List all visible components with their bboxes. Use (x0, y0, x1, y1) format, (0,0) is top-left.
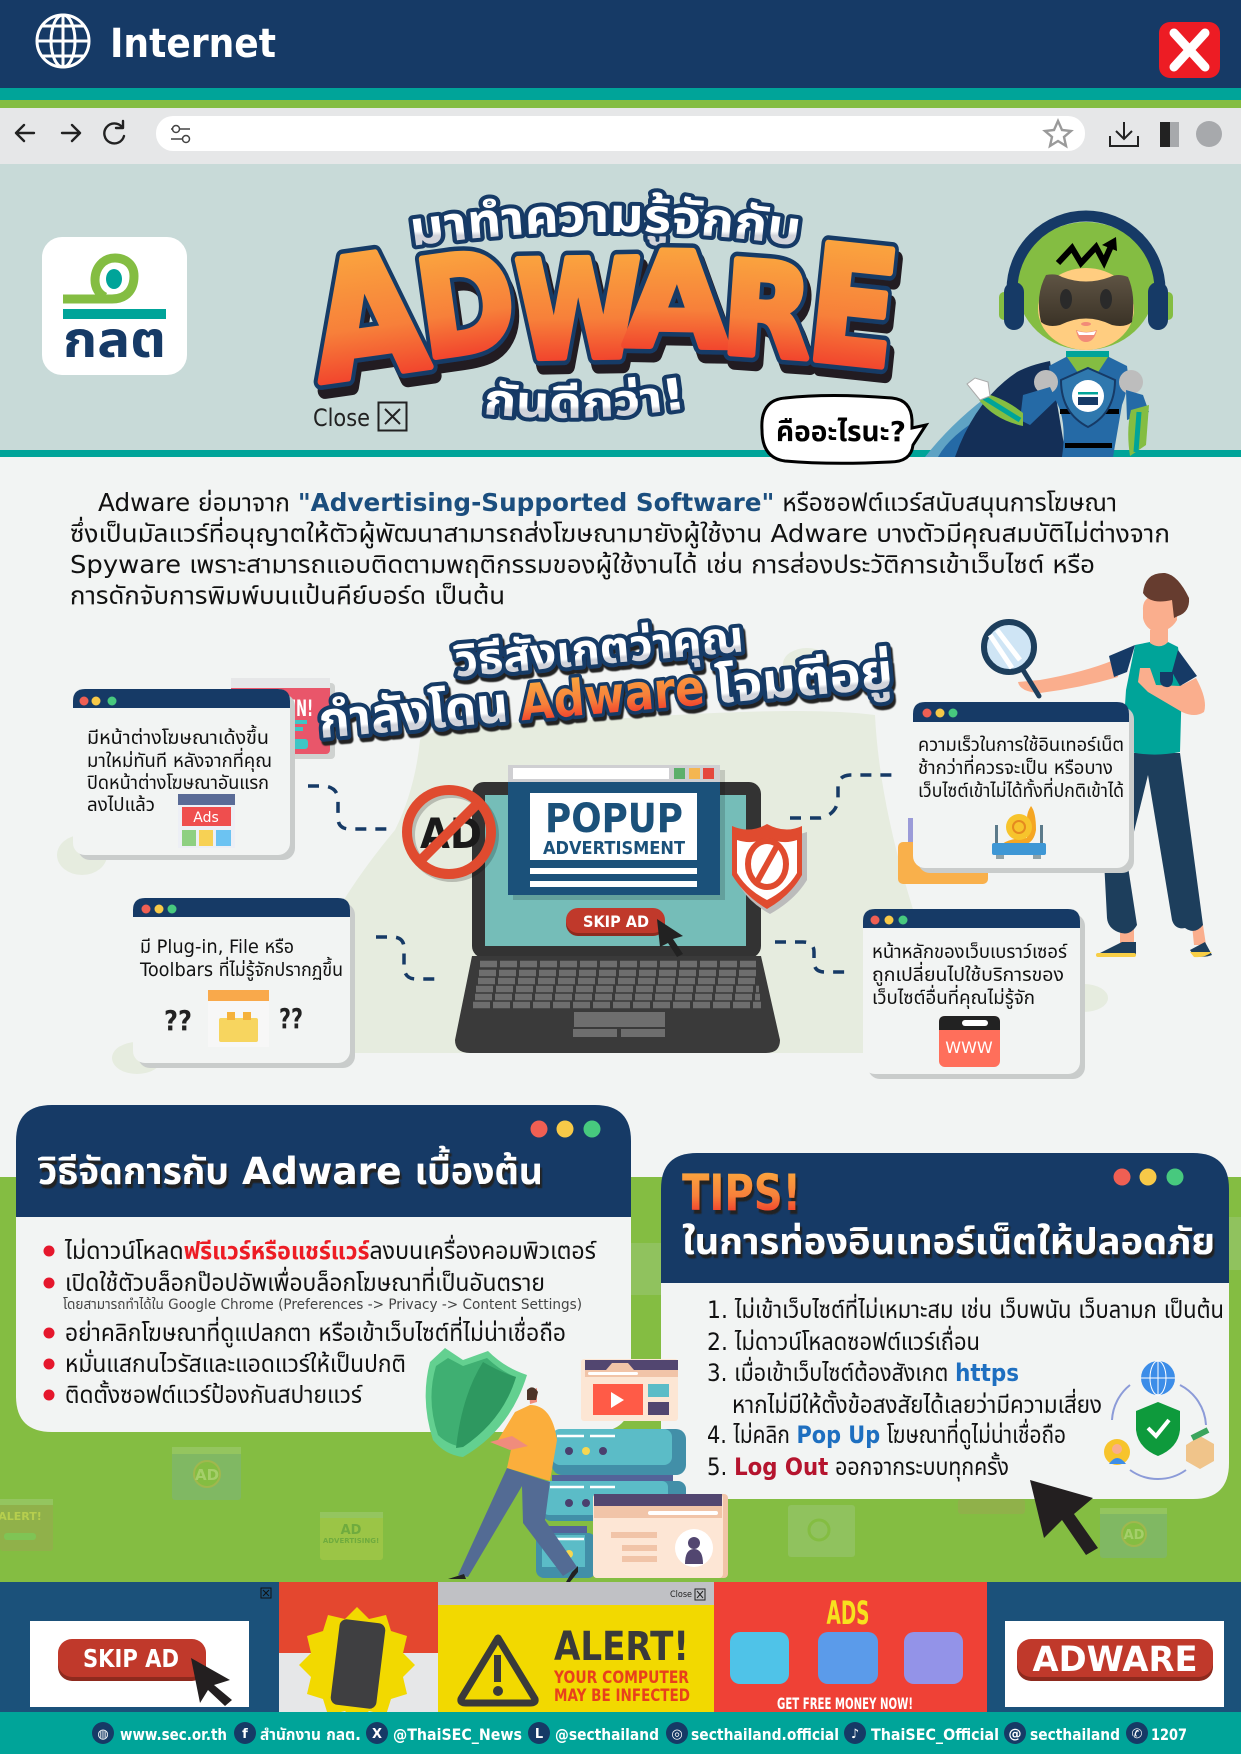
skip ad button: SKIP AD (583, 912, 649, 931)
footer contacts: ThaiSEC_Official (871, 1725, 999, 1744)
profile window (593, 1494, 728, 1578)
header bar (0, 0, 1241, 108)
section title: วิธีสังเกตว่าคุณ (452, 611, 746, 689)
card 3: ความเร็วในการใช้อินเทอร์เน็ต (918, 733, 1124, 756)
section title: โจมตีอยู่ (713, 642, 895, 716)
icon: www window (939, 1016, 1000, 1067)
popup window (508, 765, 725, 900)
shirt (498, 1405, 557, 1481)
decorative blob right (1060, 984, 1108, 1012)
illustration: man with shield and servers (426, 1348, 728, 1582)
title: ADWARE: W (514, 231, 643, 390)
title: ADWARE: R (718, 234, 817, 389)
section title: Adware (517, 658, 707, 732)
section title (316, 611, 895, 751)
TIPS heading: TIPS! (682, 1164, 801, 1222)
title: ADWARE: R (718, 234, 817, 389)
speech bubble: คืออะไรนะ? (776, 415, 906, 448)
title: bottom line: กันดีกว่า! (482, 372, 685, 422)
icon: close button (1159, 22, 1220, 78)
popup window: ADVERTISMENT (543, 838, 686, 859)
footer (0, 1712, 1241, 1754)
thumbnail: partial under tips panel (958, 1499, 1025, 1514)
tips list: 5. Log Out ออกจากระบบทุกครั้ง (707, 1451, 1009, 1482)
panel heading: วิธีจัดการกับ Adware เบื้องต้น (38, 1145, 543, 1193)
decorative blob left lower (112, 1042, 162, 1074)
thumbnail: advertising (320, 1512, 383, 1560)
footer icon glyphs: ✆ (1132, 1727, 1142, 1742)
title: ADWARE: E (800, 212, 906, 406)
speech bubble (762, 396, 926, 463)
bullet list: หมั่นแสกนไวรัสและแอดแวร์ให้เป็นปกติ (65, 1348, 406, 1378)
magnifier (1023, 670, 1039, 696)
card 4: เว็บไซต์อื่นที่คุณไม่รู้จัก (872, 984, 1035, 1010)
bullet list: อย่าคลิกโฆษณาที่ดูแปลกตา หรือเข้าเว็บไซต์ที่ไม่น่าเชื่อถือ (65, 1316, 566, 1348)
card 1: ลงไปแล้ว (87, 793, 155, 816)
footer contacts: secthailand (1030, 1725, 1120, 1744)
question marks (164, 1002, 303, 1037)
bullet list: เปิดใช้ตัวบล็อกป๊อปอัพเพื่อบล็อกโฆษณาที่เป็นอันตราย (65, 1266, 545, 1297)
laptop screen (472, 782, 761, 958)
footer icon glyphs: f (242, 1727, 248, 1742)
icon: download (1110, 122, 1138, 146)
shoes (1096, 942, 1136, 955)
bullet list (44, 1234, 597, 1409)
ankles (1120, 925, 1206, 945)
footer icons (92, 1722, 1148, 1744)
intro paragraph: ซึ่งเป็นมัลแวร์ที่อนุญาตให้ตัวผู้พัฒนาสามารถส่งโฆษณามายังผู้ใช้งาน Adware บางตัวมีคุณสมบัติไม่ต่างจาก (70, 516, 1170, 549)
thumbnail: stop (788, 1505, 855, 1557)
thumbnail: right edge (1229, 1217, 1241, 1270)
tips list: หากไม่มีให้ตั้งข้อสงสัยได้เลยว่ามีความเสี่ยง (732, 1388, 1102, 1419)
title: ADWARE (299, 212, 906, 421)
ad: alert: MAY BE INFECTED (554, 1686, 690, 1706)
panel: basic handling (16, 1105, 631, 1432)
bullet list: ไม่ดาวน์โหลดฟรีแวร์หรือแชร์แวร์ลงบนเครื่องคอมพิวเตอร์ (64, 1234, 597, 1265)
no-ad sign: AD (420, 809, 482, 858)
title: heading top line: มาทำความรู้จักกับ (408, 188, 803, 250)
card 1: มีหน้าต่างโฆษณาเด้งขึ้น (87, 724, 269, 749)
footer contacts (120, 1725, 1187, 1744)
body (1049, 357, 1128, 457)
browser toolbar (0, 108, 1241, 164)
shoes (448, 1574, 466, 1579)
tips list: 4. ไม่คลิก Pop Up โฆษณาที่ดูไม่น่าเชื่อถือ (707, 1418, 1066, 1450)
popup behind card 1: WIN! (277, 697, 313, 722)
intro paragraph: การดักจับการพิมพ์บนแป้นคีย์บอร์ด เป็นต้น (70, 581, 505, 610)
intro paragraph: Adware ย่อมาจาก "Advertising-Supported Software" หรือซอฟต์แวร์สนับสนุนการโฆษณา (98, 488, 1117, 518)
close label: Close (313, 404, 370, 432)
close label (313, 402, 406, 432)
popup behind card 3 (898, 818, 988, 884)
cape (925, 398, 1000, 457)
icon: security cycle (1104, 1361, 1214, 1479)
servers (536, 1429, 686, 1578)
icon: browser nav arrows (16, 121, 124, 143)
background blob (289, 711, 930, 1053)
intro paragraph (70, 488, 1170, 610)
card 4: หน้าหลักของเว็บเบราว์เซอร์ (872, 940, 1068, 963)
thumbnail: advertising: ADVERTISING! (323, 1537, 379, 1545)
intro paragraph: Spyware เพราะสามารถแอบติดตามพฤติกรรมของผู้ใช้งานได้ เช่น การส่องประวัติการเข้าเว็บไซต์ หรือ (70, 550, 1095, 580)
popup window: POPUP (545, 796, 683, 842)
footer contacts: 1207 (1151, 1725, 1187, 1744)
shoulders (1034, 370, 1058, 394)
title: ADWARE: A (299, 215, 437, 421)
trackpad (573, 1012, 665, 1037)
ad strip (0, 1582, 1241, 1723)
tips list (707, 1293, 1224, 1482)
pants (458, 1468, 577, 1577)
arms (1020, 387, 1056, 425)
address bar (156, 116, 1085, 151)
footer contacts: www.sec.or.th (120, 1725, 227, 1744)
footer icon glyphs: ♪ (851, 1727, 859, 1742)
ad: adware button: ADWARE (1032, 1640, 1198, 1680)
no-ad sign (407, 790, 494, 877)
ad: skip ad (30, 1588, 271, 1707)
card 3: เว็บไซต์เข้าไม่ได้ทั้งที่ปกติเข้าได้ (918, 777, 1124, 802)
skip ad button (566, 908, 683, 957)
title: ADWARE: A (299, 215, 437, 421)
card 2: มี Plug-in, File หรือ (140, 936, 294, 958)
ad: alert (438, 1582, 714, 1712)
card 4 (863, 909, 1085, 1079)
thumbnail: advertising: AD (341, 1523, 362, 1538)
logo: SEC: กลต (63, 311, 166, 369)
icon: profile (1196, 121, 1222, 147)
thumbnail: between panels (631, 1243, 661, 1295)
bullet list: โดยสามารถทำได้ใน Google Chrome (Preferences -> Privacy -> Content Settings) (63, 1297, 582, 1313)
logo: SEC (42, 237, 187, 375)
footer contacts: สำนักงาน กลต. (260, 1725, 361, 1744)
ad: alert: YOUR COMPUTER (553, 1668, 689, 1688)
tips subheading: ในการท่องอินเทอร์เน็ตให้ปลอดภัย (682, 1222, 1215, 1263)
title: ADWARE: A (623, 226, 730, 378)
decorative blob centre (346, 777, 398, 809)
title: ADWARE: W (514, 231, 643, 390)
title: ADWARE: D (408, 220, 525, 390)
sleeves (1109, 645, 1135, 677)
thumbnail: AD blocked right (1100, 1508, 1167, 1558)
shirt (1122, 642, 1182, 755)
icon: www window: WWW (945, 1038, 993, 1057)
decorative blob left (57, 835, 107, 875)
keyboard keys (473, 964, 761, 1005)
footer icon glyphs: ◎ (671, 1727, 683, 1742)
laptop base (455, 956, 780, 1053)
header title: Internet (110, 21, 276, 67)
card 1: มาใหม่ทันที หลังจากที่คุณ (87, 747, 272, 772)
ad: phone (279, 1582, 438, 1723)
banner (0, 164, 1241, 465)
person (426, 1348, 578, 1582)
man with magnifier (984, 573, 1212, 957)
ad: skip ad: SKIP AD (83, 1644, 179, 1673)
laptop (455, 765, 780, 1053)
card 4: ถูกเปลี่ยนไปใช้บริการของ (872, 961, 1064, 987)
ad: alert: ALERT! (554, 1624, 689, 1670)
tips list: 2. ไม่ดาวน์โหลดซอฟต์แวร์เถื่อน (707, 1325, 980, 1356)
dashed connectors (308, 775, 895, 979)
thumbnail: AD blocked: AD (195, 1466, 219, 1484)
decorative blob top (783, 648, 831, 680)
icon: site settings (171, 126, 190, 142)
card 3 (913, 702, 1134, 873)
ad: free money: ADS (826, 1594, 870, 1632)
card 1 (73, 689, 295, 860)
title: ADWARE: E (800, 212, 906, 406)
shield icon (732, 824, 807, 914)
large cursor (1030, 1480, 1098, 1555)
footer icon glyphs (97, 1727, 1142, 1742)
question marks: ?? (279, 1002, 303, 1035)
icon: globe (37, 15, 89, 67)
head (1150, 625, 1168, 646)
footer contacts: secthailand.official (691, 1725, 839, 1744)
video window (581, 1359, 678, 1421)
faded ad thumbnails (0, 1217, 1241, 1560)
ad: adware button (1005, 1621, 1224, 1707)
icon: snail on router (992, 806, 1046, 859)
footer icon glyphs: @ (1008, 1727, 1022, 1742)
icon: ads window (178, 794, 235, 848)
popup behind card 1 (231, 678, 335, 759)
icon: plug-in window (208, 990, 269, 1047)
head (999, 292, 1011, 320)
legs (1104, 753, 1203, 933)
footer icon glyphs: L (535, 1727, 543, 1742)
card 2 (133, 898, 355, 1068)
title: ADWARE: D (408, 220, 525, 390)
section title: กำลังโดน (316, 676, 511, 750)
green lower background (0, 1177, 1241, 1582)
icon: star (1045, 121, 1071, 146)
card 1: ปิดหน้าต่างโฆษณาอันแรก (87, 771, 269, 794)
footer icon glyphs: X (372, 1727, 382, 1742)
ad: free money: GET FREE MONEY NOW! (777, 1694, 913, 1713)
card 3: ช้ากว่าที่ควรจะเป็น หรือบาง (918, 754, 1113, 779)
thumbnail: AD blocked (172, 1447, 241, 1500)
arm to magnifier (1018, 660, 1118, 693)
thumbnail: AD blocked right: AD (1124, 1528, 1145, 1543)
bullet list: ติดตั้งซอฟต์แวร์ป้องกันสปายแวร์ (65, 1379, 363, 1409)
footer contacts: @secthailand (555, 1725, 659, 1744)
ad: alert: Close (670, 1590, 692, 1600)
footer icon glyphs: ◍ (97, 1727, 109, 1742)
footer contacts: @ThaiSEC_News (393, 1725, 522, 1744)
icon: ads window: Ads (193, 810, 219, 826)
ad: free money (714, 1582, 987, 1713)
mascot (925, 216, 1173, 457)
icon: split view (1160, 122, 1179, 147)
tips list: 3. เมื่อเข้าเว็บไซต์ต้องสังเกต https (707, 1356, 1019, 1387)
green shield (426, 1348, 527, 1457)
panel: tips (661, 1153, 1229, 1499)
question marks: ?? (164, 1004, 192, 1037)
thumbnail: virus alert (0, 1499, 53, 1551)
card 2: Toolbars ที่ไม่รู้จักปรากฏขึ้น (139, 956, 343, 982)
title: ADWARE: A (623, 226, 730, 378)
